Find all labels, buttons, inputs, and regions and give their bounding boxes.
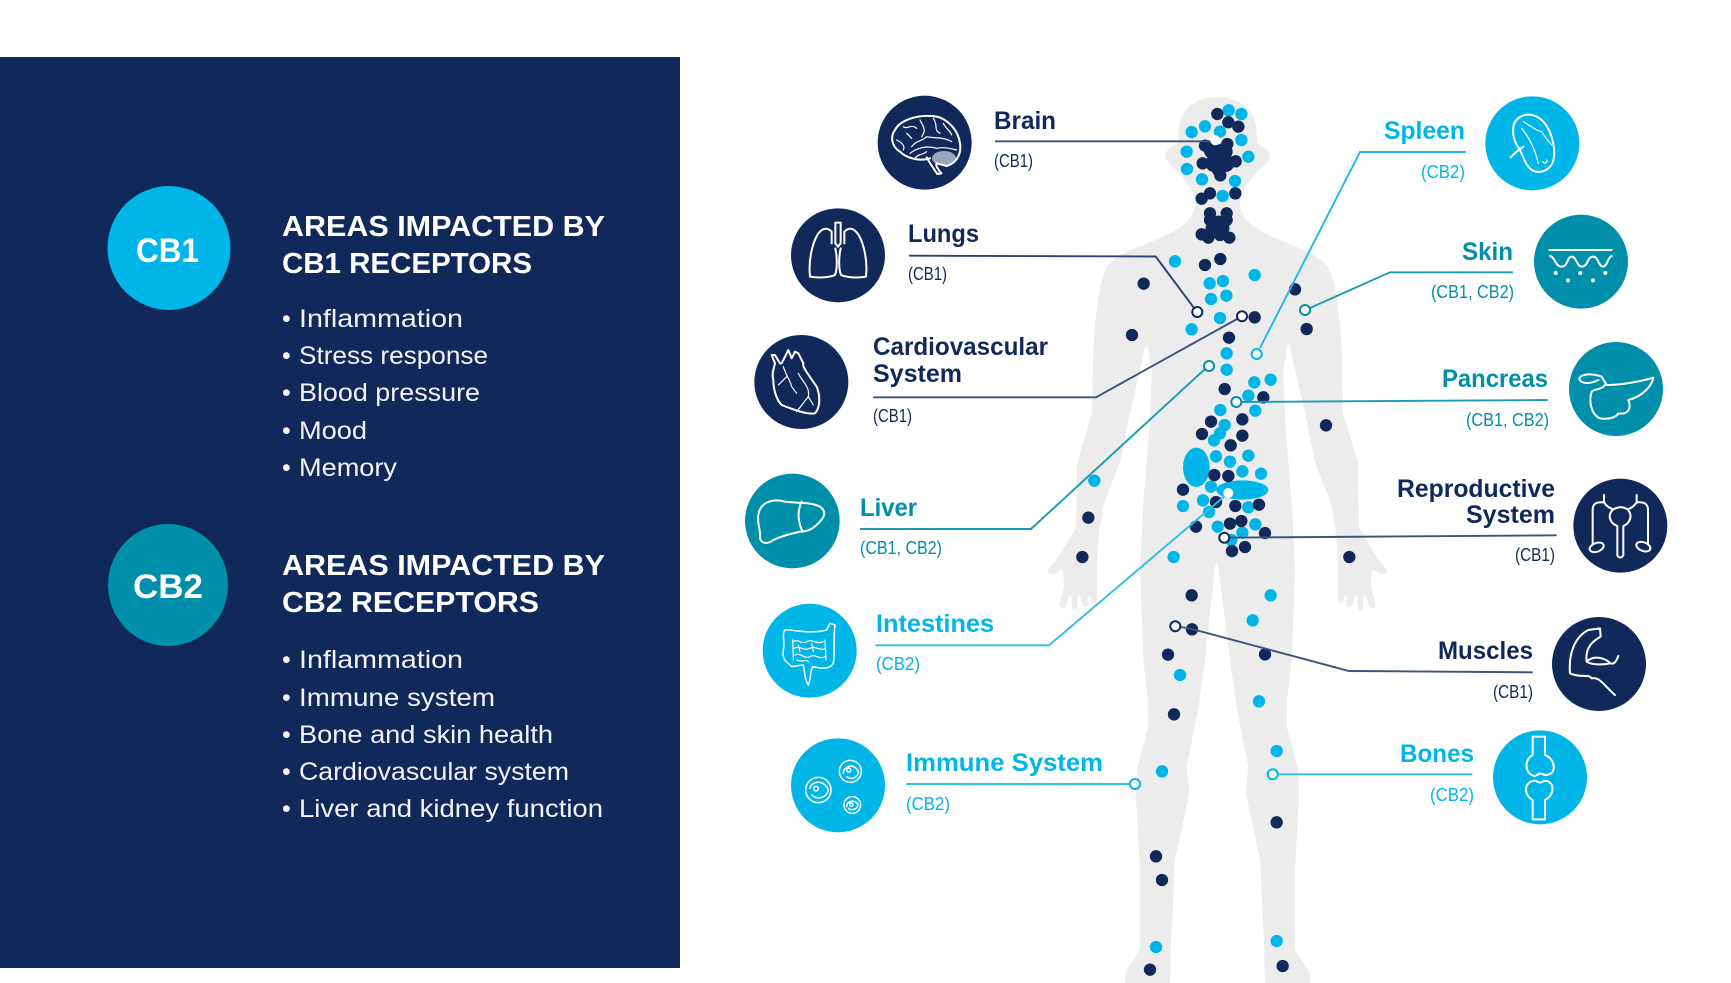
list: CB1 areas: • bbox=[282, 417, 291, 445]
callout: Liver bbox=[745, 361, 1214, 568]
list: CB1 areas: Stress response bbox=[299, 342, 488, 370]
list: CB2 areas: Cardiovascular system bbox=[299, 758, 569, 786]
receptor dots: legs bbox=[1144, 669, 1289, 976]
callout: Bones bbox=[1268, 730, 1587, 824]
icon: spleen bbox=[1485, 96, 1579, 190]
icon: lungs bbox=[791, 208, 885, 302]
badge: CB2: CB2 bbox=[133, 568, 203, 606]
badge: CB1 bbox=[108, 186, 230, 310]
callout: Cardiovascular System: Cardiovascular bbox=[873, 333, 1048, 361]
list: CB1 areas: Memory bbox=[299, 454, 398, 482]
icon: heart bbox=[754, 335, 848, 429]
callout: Immune System bbox=[791, 738, 1140, 832]
callout: Cardiovascular System: System bbox=[873, 360, 962, 388]
icon: immune cells bbox=[791, 738, 885, 832]
heading: CB1 receptors bbox=[282, 211, 605, 280]
callout: Intestines bbox=[763, 488, 1233, 698]
callout: Bones: Bones bbox=[1400, 740, 1474, 768]
icon: flexed arm bbox=[1552, 617, 1646, 711]
badge: CB2 bbox=[108, 524, 228, 646]
list: CB1 areas: • bbox=[282, 342, 291, 370]
callout: Brain bbox=[878, 96, 1220, 190]
heading: CB2 receptors: CB2 RECEPTORS bbox=[282, 587, 539, 619]
list: CB1 areas: • bbox=[282, 379, 291, 407]
list: CB2 areas: • bbox=[282, 646, 291, 674]
heading: CB2 receptors: AREAS IMPACTED BY bbox=[282, 550, 605, 582]
receptor dots: upper body bbox=[1126, 104, 1313, 376]
list: CB2 areas: • bbox=[282, 684, 291, 712]
callout: Liver: (CB1, CB2) bbox=[860, 537, 942, 558]
list: CB2 areas: Bone and skin health bbox=[299, 721, 553, 749]
callout: Lungs: Lungs bbox=[908, 220, 979, 248]
list: CB1 areas: Inflammation bbox=[299, 305, 463, 333]
heading: CB1 receptors: CB1 RECEPTORS bbox=[282, 248, 532, 280]
callout: Skin: Skin bbox=[1462, 238, 1513, 266]
callout: Reproductive System: Reproductive bbox=[1397, 475, 1555, 503]
callout: Lungs bbox=[791, 208, 1202, 317]
list: CB2 areas: • bbox=[282, 795, 291, 823]
badge: CB1: CB1 bbox=[136, 232, 199, 270]
callout: Reproductive System: System bbox=[1466, 501, 1555, 529]
callout: Muscles: Muscles bbox=[1438, 637, 1533, 665]
callout: Spleen: (CB2) bbox=[1421, 161, 1465, 182]
receptor dots: torso and hips bbox=[1076, 373, 1355, 661]
callout: Skin: (CB1, CB2) bbox=[1431, 281, 1514, 302]
callout: Pancreas: (CB1, CB2) bbox=[1466, 409, 1549, 430]
icon: skin layers bbox=[1534, 215, 1628, 309]
callout: Spleen bbox=[1252, 96, 1579, 359]
icon: intestines bbox=[763, 604, 857, 698]
callout: Bones: (CB2) bbox=[1430, 784, 1474, 805]
list: CB1 areas: • bbox=[282, 454, 291, 482]
callout: Brain: (CB1) bbox=[994, 150, 1033, 171]
callout: Intestines: Intestines bbox=[876, 610, 994, 638]
list: CB2 areas: • bbox=[282, 758, 291, 786]
callout: Muscles bbox=[1170, 617, 1646, 711]
heading: CB1 receptors: AREAS IMPACTED BY bbox=[282, 211, 605, 243]
icon: bone joint bbox=[1493, 730, 1587, 824]
list: CB2 areas: Inflammation bbox=[299, 646, 463, 674]
callout: Reproductive System: (CB1) bbox=[1515, 544, 1555, 565]
body silhouette bbox=[1046, 97, 1389, 983]
callout: Immune System: Immune System bbox=[906, 749, 1103, 777]
callout: Muscles: (CB1) bbox=[1493, 681, 1533, 702]
callout: Skin bbox=[1300, 215, 1628, 315]
panel: CB1 and CB2 receptors bbox=[0, 57, 680, 968]
list: CB2 areas bbox=[282, 646, 603, 823]
list: CB1 areas bbox=[282, 305, 488, 482]
icon: reproductive organs bbox=[1573, 479, 1667, 573]
list: CB1 areas: Blood pressure bbox=[299, 379, 480, 407]
heading: CB2 receptors bbox=[282, 550, 605, 619]
list: CB2 areas: • bbox=[282, 721, 291, 749]
list: CB2 areas: Immune system bbox=[299, 684, 495, 712]
callout: Pancreas: Pancreas bbox=[1442, 365, 1548, 393]
callout: Reproductive System bbox=[1219, 475, 1667, 573]
list: CB1 areas: • bbox=[282, 305, 291, 333]
list: CB1 areas: Mood bbox=[299, 417, 367, 445]
list: CB2 areas: Liver and kidney function bbox=[299, 795, 603, 823]
icon: liver bbox=[745, 474, 840, 568]
icon: brain bbox=[878, 96, 972, 190]
callout: Pancreas bbox=[1231, 342, 1663, 436]
callout: Liver: Liver bbox=[860, 494, 917, 522]
callout: Immune System: (CB2) bbox=[906, 793, 950, 814]
callout: Brain: Brain bbox=[994, 107, 1056, 135]
callout: Intestines: (CB2) bbox=[876, 653, 920, 674]
callout: Lungs: (CB1) bbox=[908, 263, 947, 284]
callout: Cardiovascular System: (CB1) bbox=[873, 405, 912, 426]
icon: pancreas bbox=[1569, 342, 1663, 436]
callout: Spleen: Spleen bbox=[1384, 117, 1465, 145]
callout: Cardiovascular System bbox=[754, 311, 1247, 429]
